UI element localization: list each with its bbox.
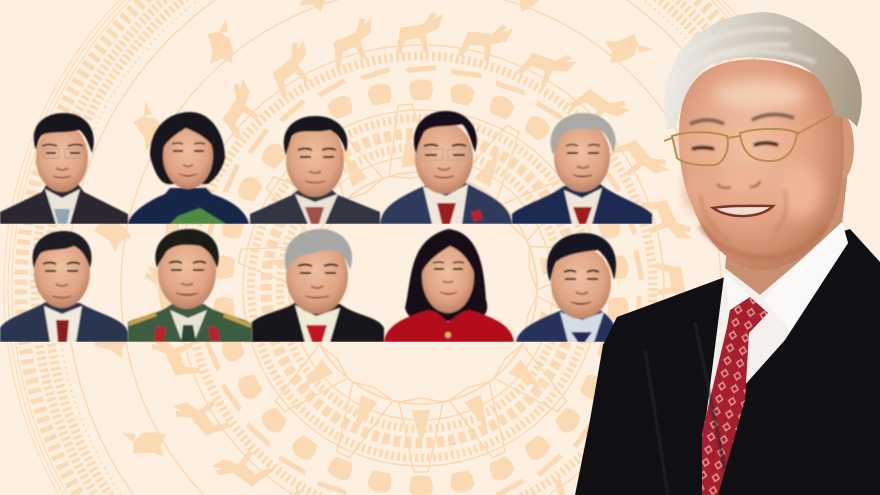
ear xyxy=(830,115,854,179)
portrait 5 xyxy=(512,113,652,224)
portrait 10 xyxy=(516,233,620,342)
portrait row 2 xyxy=(0,229,620,342)
portrait 7 xyxy=(128,229,252,342)
face xyxy=(679,59,844,270)
neck xyxy=(725,170,848,295)
chin shadow xyxy=(700,225,826,258)
tie xyxy=(702,297,768,495)
nose xyxy=(723,166,758,191)
mouth xyxy=(713,206,773,216)
lapel shadow xyxy=(645,322,725,495)
right lapel xyxy=(727,300,880,495)
portrait 8 xyxy=(252,229,384,342)
portrait 3 xyxy=(250,116,380,224)
portrait 4 xyxy=(380,111,512,224)
portrait 2 xyxy=(128,112,249,224)
collar xyxy=(724,222,848,330)
portrait 1 xyxy=(0,113,128,224)
glasses xyxy=(664,116,830,165)
main portrait xyxy=(575,12,880,495)
portrait 9 xyxy=(384,229,514,342)
eyebrows xyxy=(690,114,794,124)
portrait row 1 xyxy=(0,111,652,224)
suit xyxy=(575,229,880,495)
shirt xyxy=(703,222,848,432)
hair xyxy=(664,12,862,130)
portrait 6 xyxy=(0,231,128,342)
highlight xyxy=(714,81,806,109)
eyes xyxy=(692,143,778,149)
